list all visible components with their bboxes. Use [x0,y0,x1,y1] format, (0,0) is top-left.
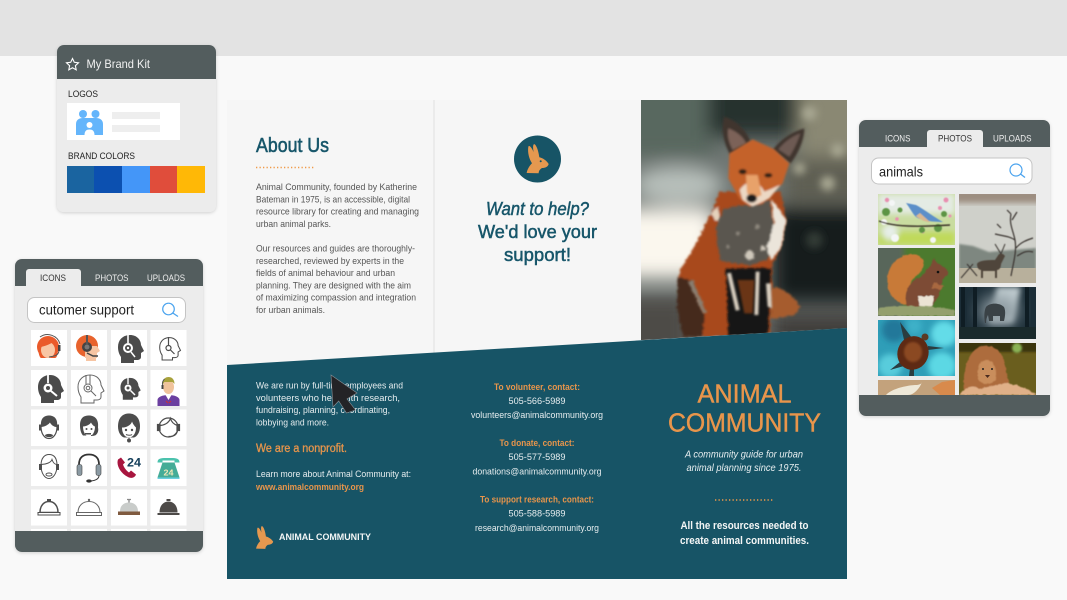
photos panel header [859,120,1050,147]
fold line [433,100,435,353]
tab labels: PHOTOS [95,273,128,284]
icon: service bell outline [38,499,60,515]
icon grid [31,330,186,533]
learn more text: Learn more about Animal Community at: [256,469,411,480]
tab labels: UPLOADS [147,273,185,284]
logo: animal community: ANIMAL COMMUNITY [279,532,372,543]
contact details: To volunteer, contact: [494,382,580,393]
icon: support man profile [76,335,100,361]
logo: animal community [256,526,372,549]
panel: icons search [15,259,203,552]
brand color swatches [67,166,205,193]
icon: teal phone 24: 24 [164,468,174,478]
about us text: Bateman in 1975, is an accessible, digital [256,194,410,206]
icon: outlined woman headset [158,418,180,437]
staff text: fundraising, planning, coordinating, [256,405,390,416]
icon: service bell dark [158,499,180,515]
icon: headphones [77,454,101,483]
nonprofit callout: We are a nonprofit. [256,443,347,455]
cover tagline [680,520,809,547]
fox tail [770,287,800,318]
photos search box: animals [879,164,923,180]
want to help heading: We'd love your [478,221,597,242]
active photos tab [927,130,983,147]
about us text: resource library for creating and managing [256,206,419,218]
cursor arrow [331,375,357,413]
contact details: 505-566-5989 [508,396,566,407]
icon: red phone 24 [117,456,141,478]
fox leg highlights [727,272,772,315]
photo: lion [959,343,1036,395]
logos label: LOGOS [68,89,98,100]
website link: www.animalcommunity.org [255,482,364,493]
staff text: lobbying and more. [256,418,329,428]
contact details [471,382,603,534]
search box [28,298,186,322]
about us heading: About Us [256,135,329,157]
about us text: urban animal parks. [256,219,331,230]
brand colors label: BRAND COLORS [68,151,135,162]
icon: star [66,58,78,70]
icon: service bell colored [118,500,140,515]
top toolbar band [0,0,1067,56]
icons panel header [15,259,203,286]
contact details: volunteers@animalcommunity.org [471,410,603,421]
photos tab labels [885,134,1032,144]
contact details: 505-588-5989 [508,508,566,520]
fox head [728,139,789,207]
icons panel footer [15,531,203,552]
panel: my brand kit [57,45,216,212]
icon: support woman [37,335,60,358]
fox body [677,192,786,337]
about us text: researched, reviewed by experts in the [256,256,404,267]
icon: outlined headset profile [160,337,180,360]
fox ears [723,117,804,163]
photo: squirrel [878,248,955,316]
brand kit header [57,45,216,79]
icon: thin man headset [40,454,58,478]
about us text: for urban animals. [256,305,325,316]
staff text [256,380,403,428]
about us text: Our resources and guides are thoroughly- [256,244,415,254]
contact details: To support research, contact: [480,494,594,506]
cover tagline: All the resources needed to [680,520,809,532]
divider [256,166,315,168]
photos search box [872,158,1032,184]
photo: elephant in forest [959,287,1036,339]
icon: woman headset front [80,416,98,436]
photos tab labels: PHOTOS [938,134,972,144]
contact details: research@animalcommunity.org [475,523,599,534]
cover title: ANIMAL [698,378,792,408]
cover title: COMMUNITY [668,408,821,438]
icon: man headset front [39,416,59,438]
icon: red phone 24: 24 [127,456,141,470]
about us text [256,182,419,316]
photos tab labels: UPLOADS [993,134,1032,144]
contact details: 505-577-5989 [508,452,566,463]
icon: dark headset profile [118,334,144,363]
logo card [67,103,180,140]
active tab [26,269,81,286]
cover tagline: create animal communities. [680,535,809,547]
contact details: To donate, contact: [500,438,574,449]
cover subtitle: animal planning since 1975. [686,462,802,474]
want to help heading [478,198,597,265]
about us text: fields of animal behaviour and urban [256,268,395,279]
cover subtitle [684,448,803,474]
fox chest [688,198,786,337]
icon: teal phone 24 [158,458,180,479]
icon: thin headset profile [78,375,104,403]
tab labels: ICONS [40,273,66,284]
about us text: planning. They are designed with the aim [256,280,411,292]
search box: cutomer support [39,302,134,318]
photo: bird on blossom [878,194,955,245]
staff text: volunteers who help with research, [256,393,400,404]
teal lower band [227,328,847,579]
icon: bold headset profile [38,374,64,403]
photo: swan [878,380,955,395]
contact details: donations@animalcommunity.org [472,466,602,478]
icon: rabbit badge [514,136,561,182]
icon: support agent [158,377,180,406]
about us text: Animal Community, founded by Katherine [256,182,417,193]
cover title [668,378,821,438]
want to help heading: support! [504,244,571,265]
panel: photos search [859,120,1050,416]
want to help heading: Want to help? [486,198,590,219]
photo: turtle [878,320,955,376]
photo: fox [641,100,847,340]
staff text: We are run by full-time employees and [256,380,403,392]
panel: brochure [227,80,868,579]
icon: woman headset bold [118,414,140,442]
brand kit title: My Brand Kit [86,57,151,71]
cover subtitle: A community guide for urban [684,448,803,460]
photos panel footer [859,395,1050,416]
tab labels [40,273,185,284]
photos tab labels: ICONS [885,134,910,144]
icon: service bell thin [76,499,102,516]
cover divider [715,499,773,501]
photo: deer and tree [959,194,1036,283]
about us text: of maximizing compassion and integration [256,292,416,304]
icon: small dark profile [120,377,141,400]
